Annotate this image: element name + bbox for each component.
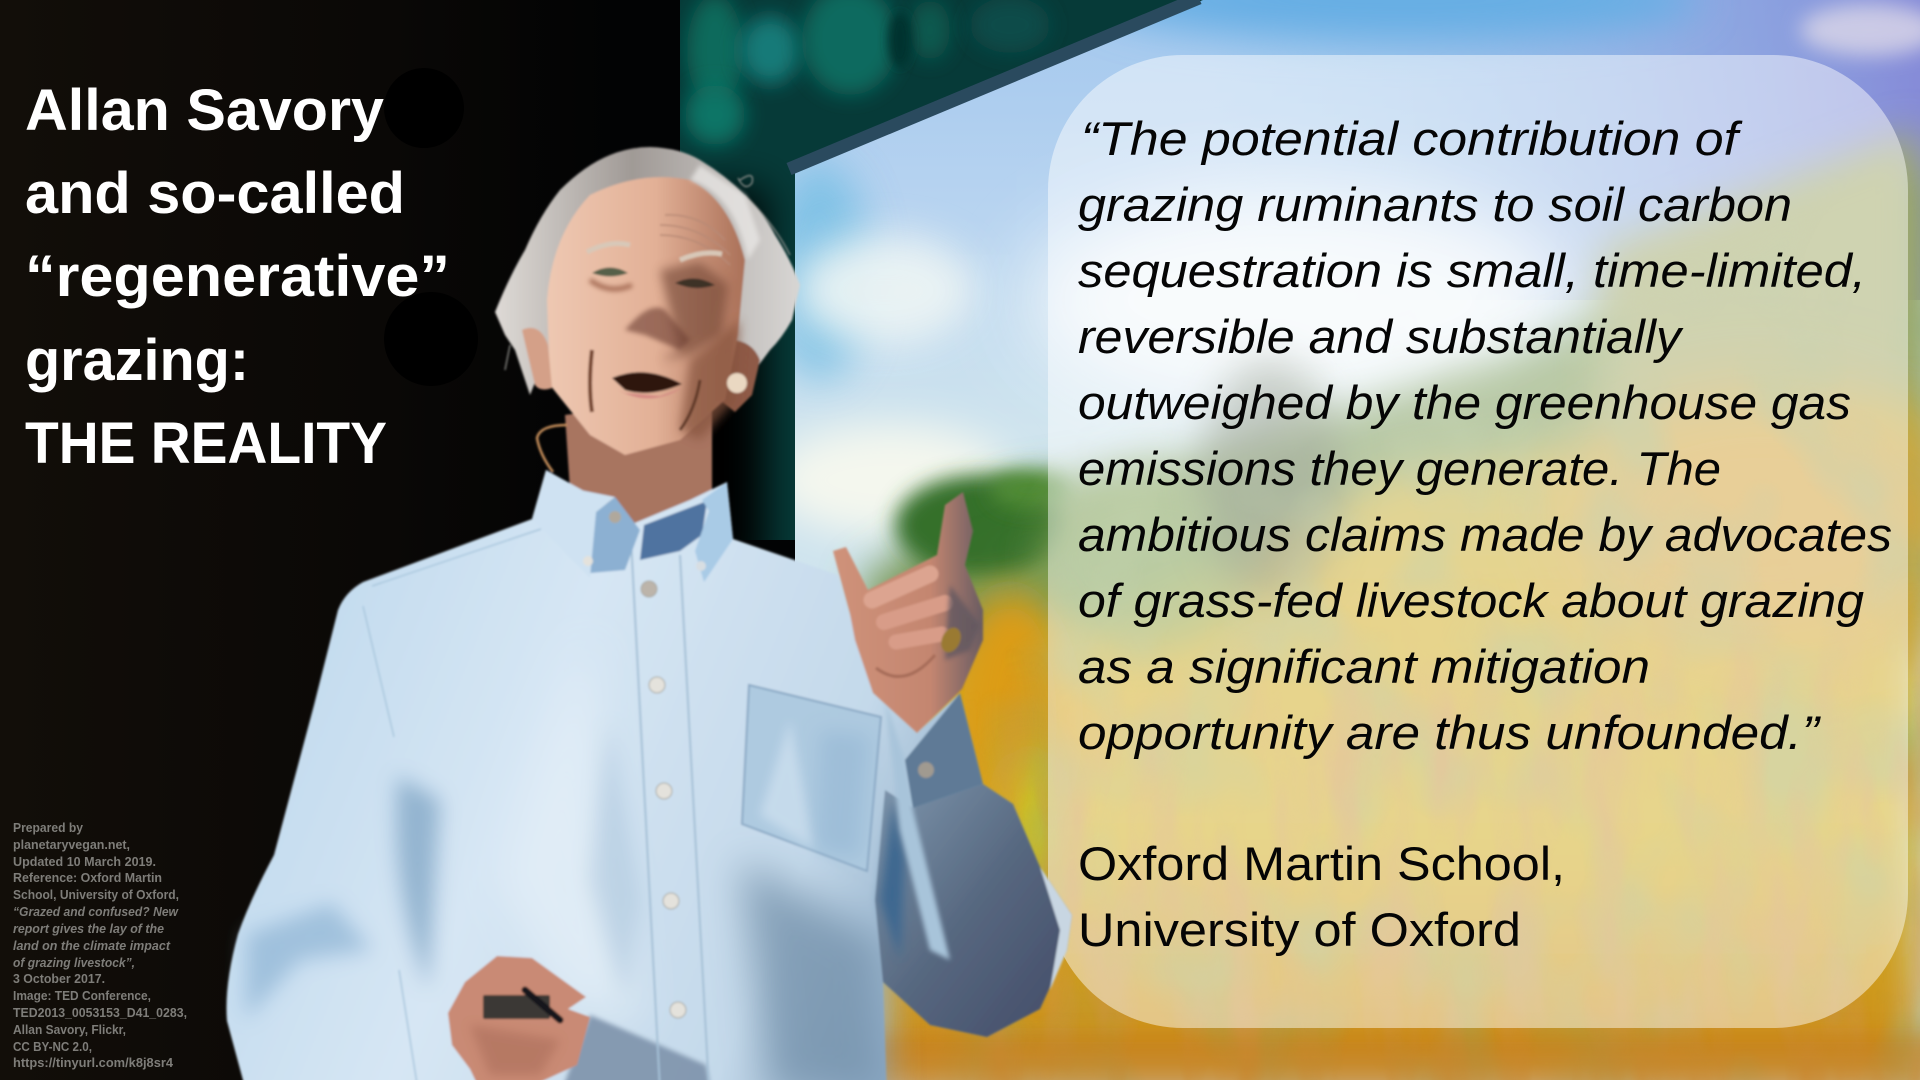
folded fingers and ring: [872, 574, 980, 676]
mouth: [612, 372, 682, 399]
credits and references: land on the climate impact: [13, 938, 171, 953]
shirt buttons: [641, 581, 686, 1018]
credits and references: Image: TED Conference,: [13, 988, 151, 1003]
hair back: [495, 147, 800, 395]
quote text: “The potential contribution of: [1081, 112, 1743, 165]
gap shadow between torso and sleeve: [880, 800, 905, 960]
quote text: emissions they generate. The: [1078, 442, 1721, 495]
credits and references: CC BY-NC 2.0,: [13, 1039, 92, 1054]
eyebrows: [587, 244, 722, 260]
title: [25, 78, 450, 476]
credits and references: “Grazed and confused? New: [13, 904, 179, 919]
credits and references: https://tinyurl.com/k8j8sr4: [13, 1055, 174, 1070]
quote text: of grass-fed livestock about grazing: [1078, 574, 1864, 627]
title: and so-called: [25, 161, 405, 226]
placket lines: [631, 539, 709, 1080]
quote text: reversible and substantially: [1078, 310, 1684, 363]
eyes: [592, 268, 715, 288]
credits and references: of grazing livestock”,: [13, 955, 135, 970]
credits and references: planetaryvegan.net,: [13, 837, 130, 852]
quote text: ambitious claims made by advocates: [1078, 508, 1892, 561]
title: Allan Savory: [25, 78, 384, 143]
mic wire: [537, 425, 567, 472]
cuff: [905, 693, 983, 808]
quote attribution: Oxford Martin School,: [1078, 837, 1565, 890]
title: grazing:: [25, 328, 249, 393]
quote text: sequestration is small, time-limited,: [1078, 244, 1866, 297]
credits and references: report gives the lay of the: [13, 921, 164, 936]
remote control: [483, 990, 560, 1020]
title: “regenerative”: [25, 244, 450, 309]
cuff button: [918, 762, 934, 778]
quote attribution: [1078, 837, 1565, 956]
credits and references: Reference: Oxford Martin: [13, 870, 162, 885]
quote attribution: University of Oxford: [1078, 903, 1521, 956]
speaker photo illustration: [226, 147, 1072, 1080]
face: [547, 177, 745, 455]
quote panel: translucent rounded rectangle: [1048, 55, 1908, 1028]
quote text: opportunity are thus unfounded.”: [1078, 706, 1822, 759]
earpiece mic: [727, 373, 747, 393]
facial shadows: [590, 262, 740, 440]
forehead wrinkles: [660, 215, 730, 265]
collar: [532, 470, 733, 582]
left hand knuckle shading: [470, 1025, 560, 1075]
credits and references: Allan Savory, Flickr,: [13, 1022, 126, 1037]
nose: [625, 308, 690, 350]
quote text: outweighed by the greenhouse gas: [1078, 376, 1851, 429]
neck: [565, 395, 712, 530]
quote text: [1078, 112, 1892, 759]
hair strand over forehead: [690, 165, 760, 260]
pocket: [742, 685, 881, 871]
quote text: grazing ruminants to soil carbon: [1078, 178, 1792, 231]
credits and references: [13, 820, 187, 1070]
right hand, raised: [833, 492, 983, 733]
cuff edge: [1040, 867, 1072, 990]
rolled right sleeve in shadow: [875, 784, 1072, 1037]
black circle top: [384, 68, 464, 148]
quote text: as a significant mitigation: [1078, 640, 1650, 693]
title: THE REALITY: [25, 411, 387, 476]
sleeve highlight band: [885, 700, 950, 960]
left hand holding remote: [448, 956, 590, 1080]
flyaway hairs: [505, 176, 790, 370]
black circle lower: [384, 292, 478, 386]
credits and references: Updated 10 March 2019.: [13, 854, 156, 869]
right ear: [720, 340, 760, 412]
credits and references: School, University of Oxford,: [13, 887, 179, 902]
credits and references: TED2013_0053153_D41_0283,: [13, 1005, 187, 1020]
credits and references: 3 October 2017.: [13, 971, 105, 986]
credits and references: Prepared by: [13, 820, 84, 835]
shirt torso and left arm: [226, 470, 1072, 1080]
left ear: [522, 328, 552, 389]
